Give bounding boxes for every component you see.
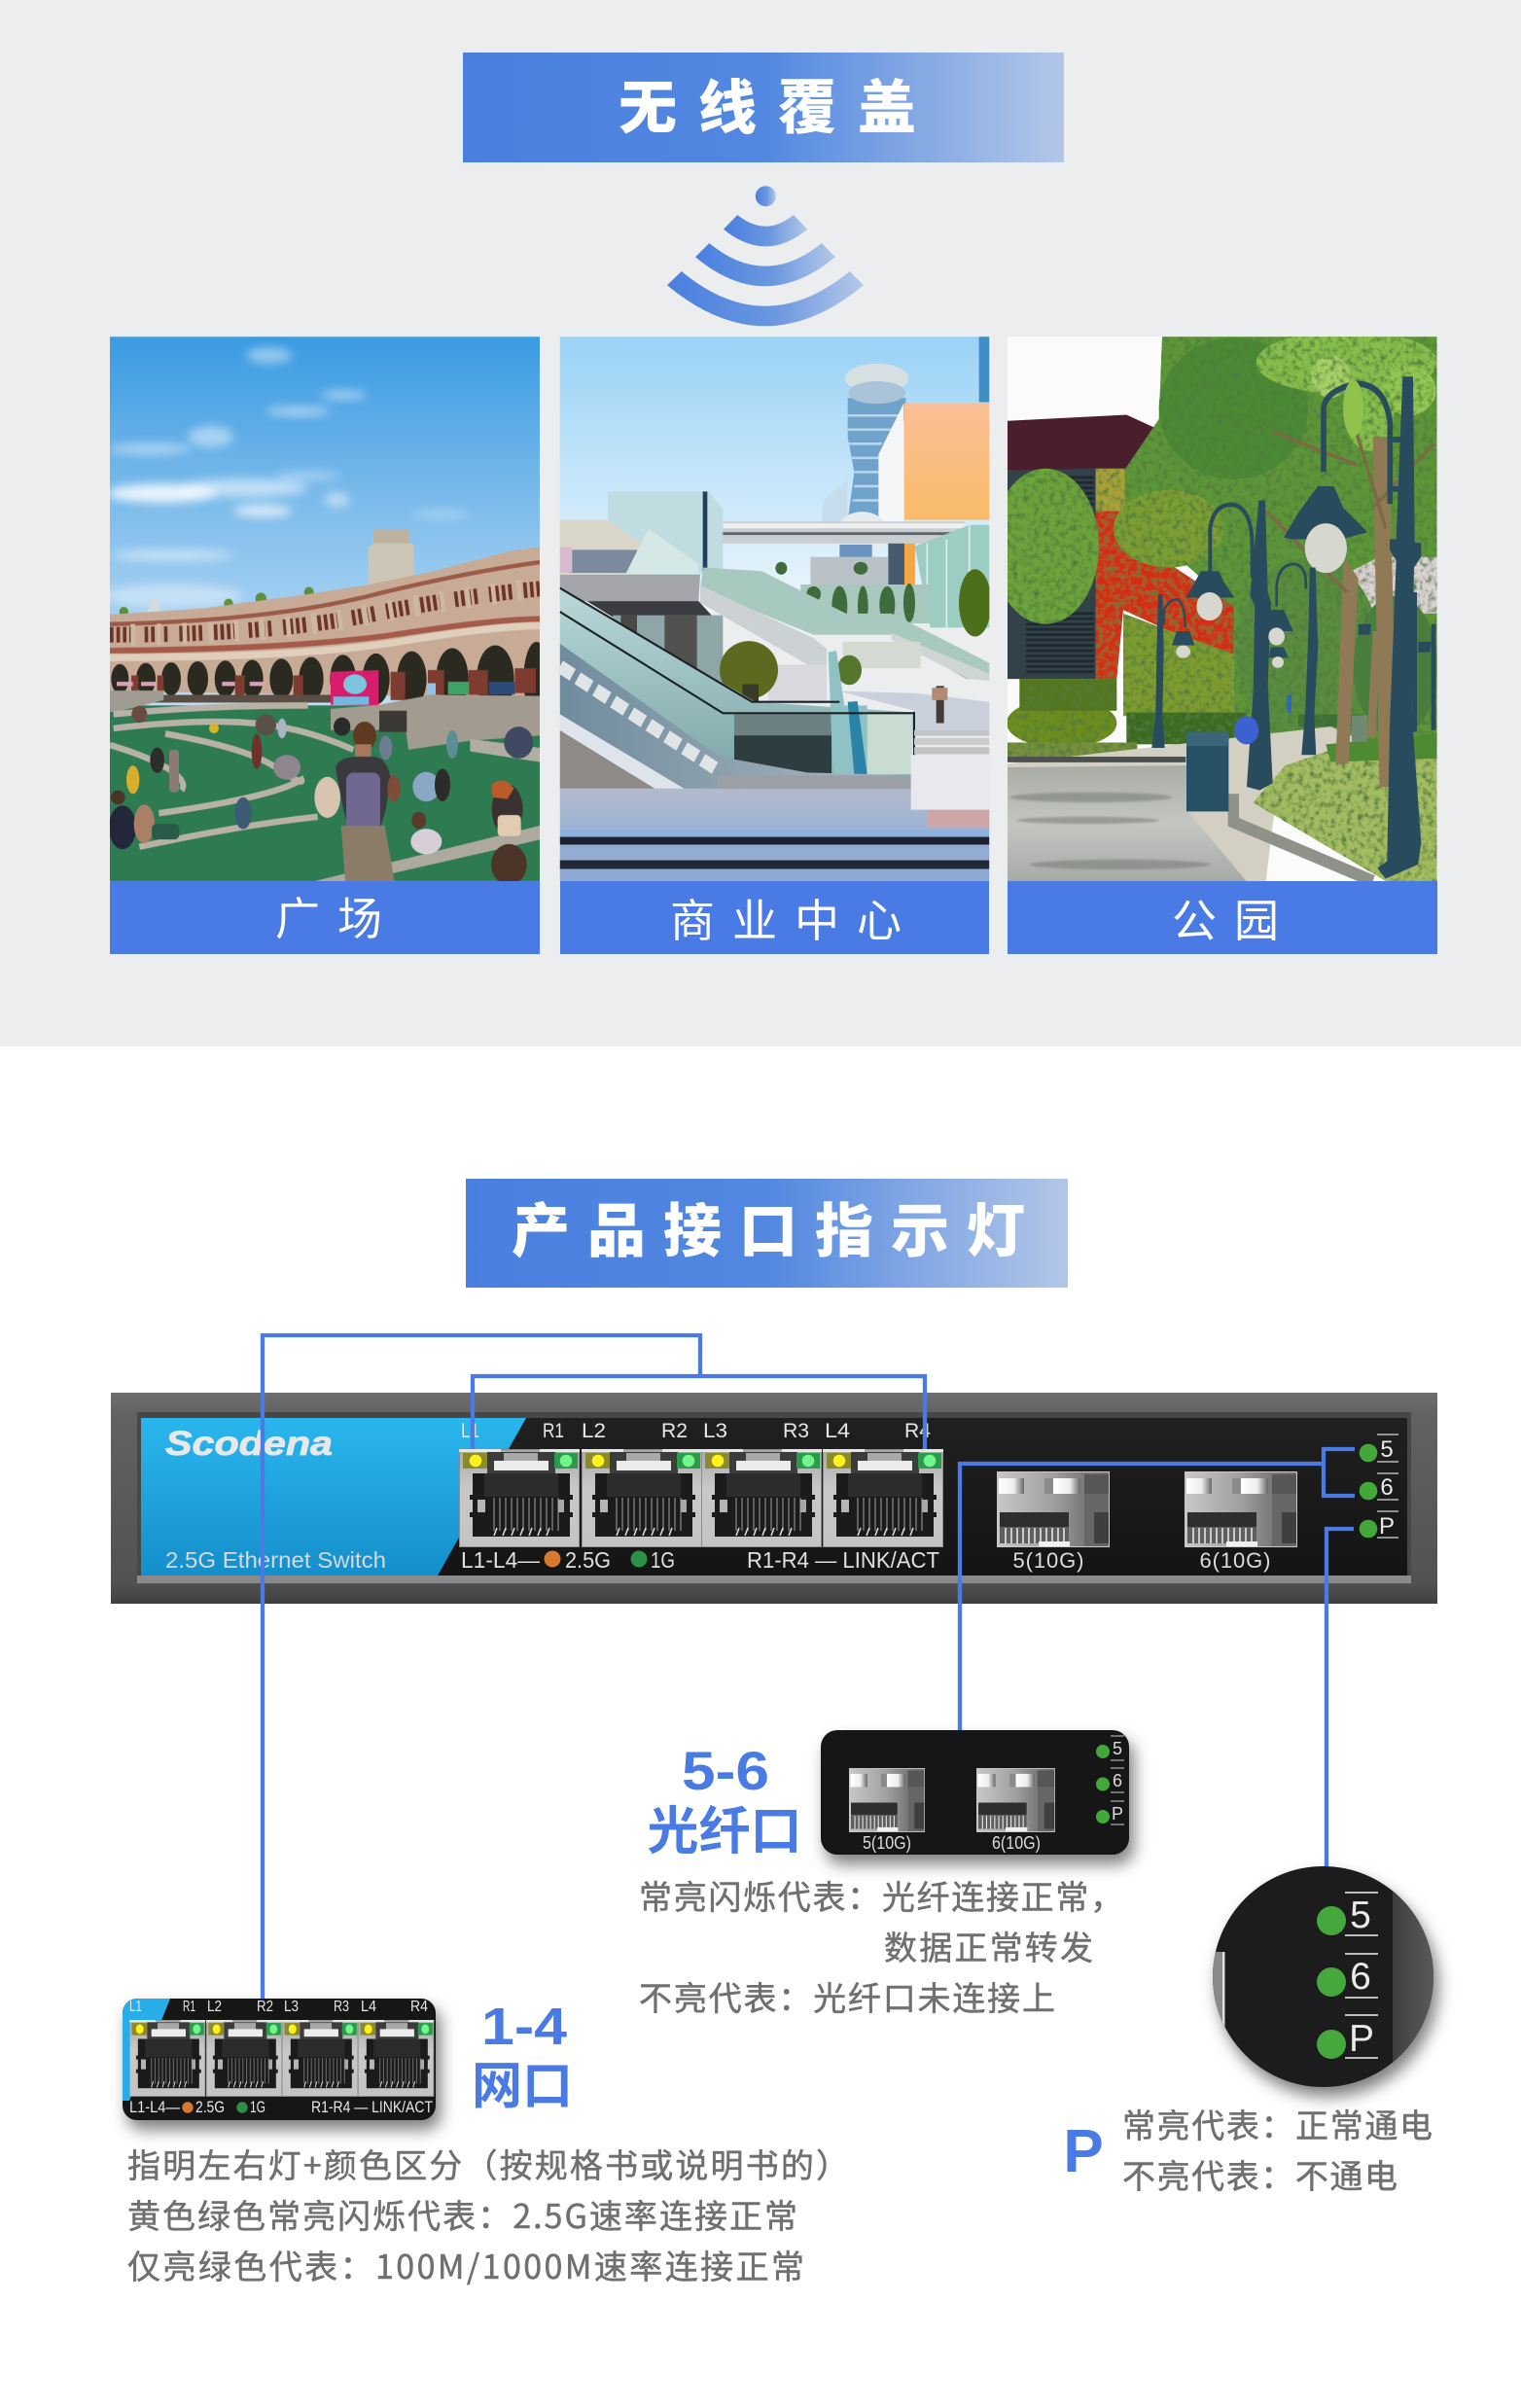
photo: park (992, 331, 1437, 881)
heading: wireless coverage (463, 53, 1064, 162)
SFP labels (1013, 1548, 1270, 1573)
icon: wifi signal (667, 186, 864, 326)
text block: ports 1-4 description: 黄色绿色常亮闪烁代表：2.5G速率连接正常 (127, 2190, 797, 2238)
text block: ports 5-6: 不亮代表：光纤口未连接上 (639, 1972, 1055, 2020)
card: RJ45 detail: L3 (284, 1999, 299, 2015)
port labels: L1 (461, 1420, 479, 1442)
port labels: R3 (783, 1420, 809, 1442)
card: SFP detail: 6(10G) (992, 1833, 1041, 1853)
card: RJ45 detail: R1-R4 — LINK/ACT (311, 2098, 433, 2116)
card: RJ45 detail: R3 (334, 1999, 349, 2015)
text block: ports 1-4 description: 指明左右灯+颜色区分（按规格书或说明书的） (127, 2140, 849, 2187)
RJ45 ports (459, 1449, 943, 1547)
text block: power LED: 常亮代表：正常通电 (1122, 2100, 1433, 2147)
text block: ports 5-6: 常亮闪烁代表：光纤连接正常， (639, 1871, 1123, 1919)
SFP cages (997, 1471, 1297, 1547)
text block: ports 1-4 title: 1-4 (481, 1998, 567, 2056)
port labels: L3 (703, 1420, 727, 1442)
panel: wireless coverage section background (0, 0, 1521, 1046)
card: SFP detail: 5 (1113, 1739, 1122, 1758)
heading: product interface indicators (466, 1179, 1068, 1288)
port labels (461, 1420, 931, 1442)
card: RJ45 detail: L4 (361, 1999, 376, 2015)
port labels: R4 (904, 1420, 931, 1442)
label bar: park: 公园 (1172, 886, 1296, 950)
text block: ports 5-6: 5-6 (682, 1740, 769, 1801)
SFP labels: 6(10G) (1200, 1548, 1270, 1573)
card: RJ45 detail: 1G (250, 2098, 265, 2116)
text block: power LED: P (1063, 2118, 1104, 2185)
card: SFP detail: P (1112, 1804, 1123, 1824)
speed legend: 1G (651, 1547, 675, 1573)
speed legend (461, 1547, 939, 1573)
model name: 2.5G Ethernet Switch (165, 1547, 386, 1573)
text block: power LED (1063, 2100, 1433, 2198)
label bar: park (1008, 881, 1437, 954)
text block: ports 1-4 title (472, 1998, 573, 2118)
speed legend: L1-L4— (461, 1547, 540, 1573)
card: RJ45 detail: L1-L4— (129, 2098, 180, 2116)
text block: ports 5-6: 数据正常转发 (884, 1922, 1093, 1969)
label bar: commercial center (560, 881, 989, 954)
status LEDs: 5 (1380, 1436, 1394, 1463)
text block: ports 5-6 (639, 1740, 1123, 2020)
status LEDs (1360, 1434, 1398, 1540)
card: RJ45 detail: R4 (410, 1999, 428, 2015)
card: status LED magnifier: P (1349, 2018, 1374, 2060)
card: RJ45 detail: R1 (183, 1999, 195, 2015)
text block: ports 5-6: 光纤口 (648, 1790, 801, 1864)
label bar: plaza (110, 881, 540, 954)
port labels: R1 (543, 1420, 564, 1442)
connector lines (263, 1335, 1355, 1999)
port labels: L2 (582, 1420, 606, 1442)
card: SFP detail: 6 (1113, 1771, 1122, 1790)
card: RJ45 detail: R2 (257, 1999, 273, 2015)
text block: ports 1-4 description: 仅亮绿色代表：100M/1000M速率连接正常 (127, 2241, 804, 2288)
photo: commercial center (560, 336, 991, 881)
SFP labels: 5(10G) (1013, 1548, 1083, 1573)
label bar: plaza: 广场 (275, 884, 400, 948)
card: RJ45 detail (123, 1999, 436, 2120)
speed legend: R1-R4 — LINK/ACT (747, 1547, 939, 1573)
brand logo: Scodena (165, 1425, 333, 1463)
card: SFP detail (821, 1730, 1129, 1855)
label bar: commercial center: 商业中心 (670, 886, 919, 950)
heading: wireless coverage: 无线覆盖 (619, 61, 937, 146)
text block: ports 1-4 title: 网口 (472, 2045, 573, 2118)
card: RJ45 detail: 2.5G (195, 2098, 225, 2116)
card: status LED magnifier: 5 (1350, 1895, 1371, 1936)
card: status LED magnifier: 6 (1350, 1956, 1371, 1998)
port labels: R2 (661, 1420, 688, 1442)
port labels: L4 (825, 1420, 850, 1442)
card: SFP detail: 5(10G) (863, 1833, 911, 1853)
card: status LED magnifier (1211, 1862, 1439, 2096)
text block: power LED: 不亮代表：不通电 (1122, 2150, 1397, 2198)
card: RJ45 detail: L2 (207, 1999, 222, 2015)
text block: ports 1-4 description (127, 2140, 849, 2288)
photo: plaza (100, 336, 549, 885)
card: RJ45 detail: L1 (129, 1999, 142, 2015)
heading: product interface indicators: 产品接口指示灯 (512, 1185, 1043, 1269)
status LEDs: P (1379, 1513, 1395, 1540)
speed legend: 2.5G (565, 1547, 611, 1573)
status LEDs: 6 (1380, 1474, 1394, 1501)
panel: switch front panel (111, 1393, 1437, 1604)
